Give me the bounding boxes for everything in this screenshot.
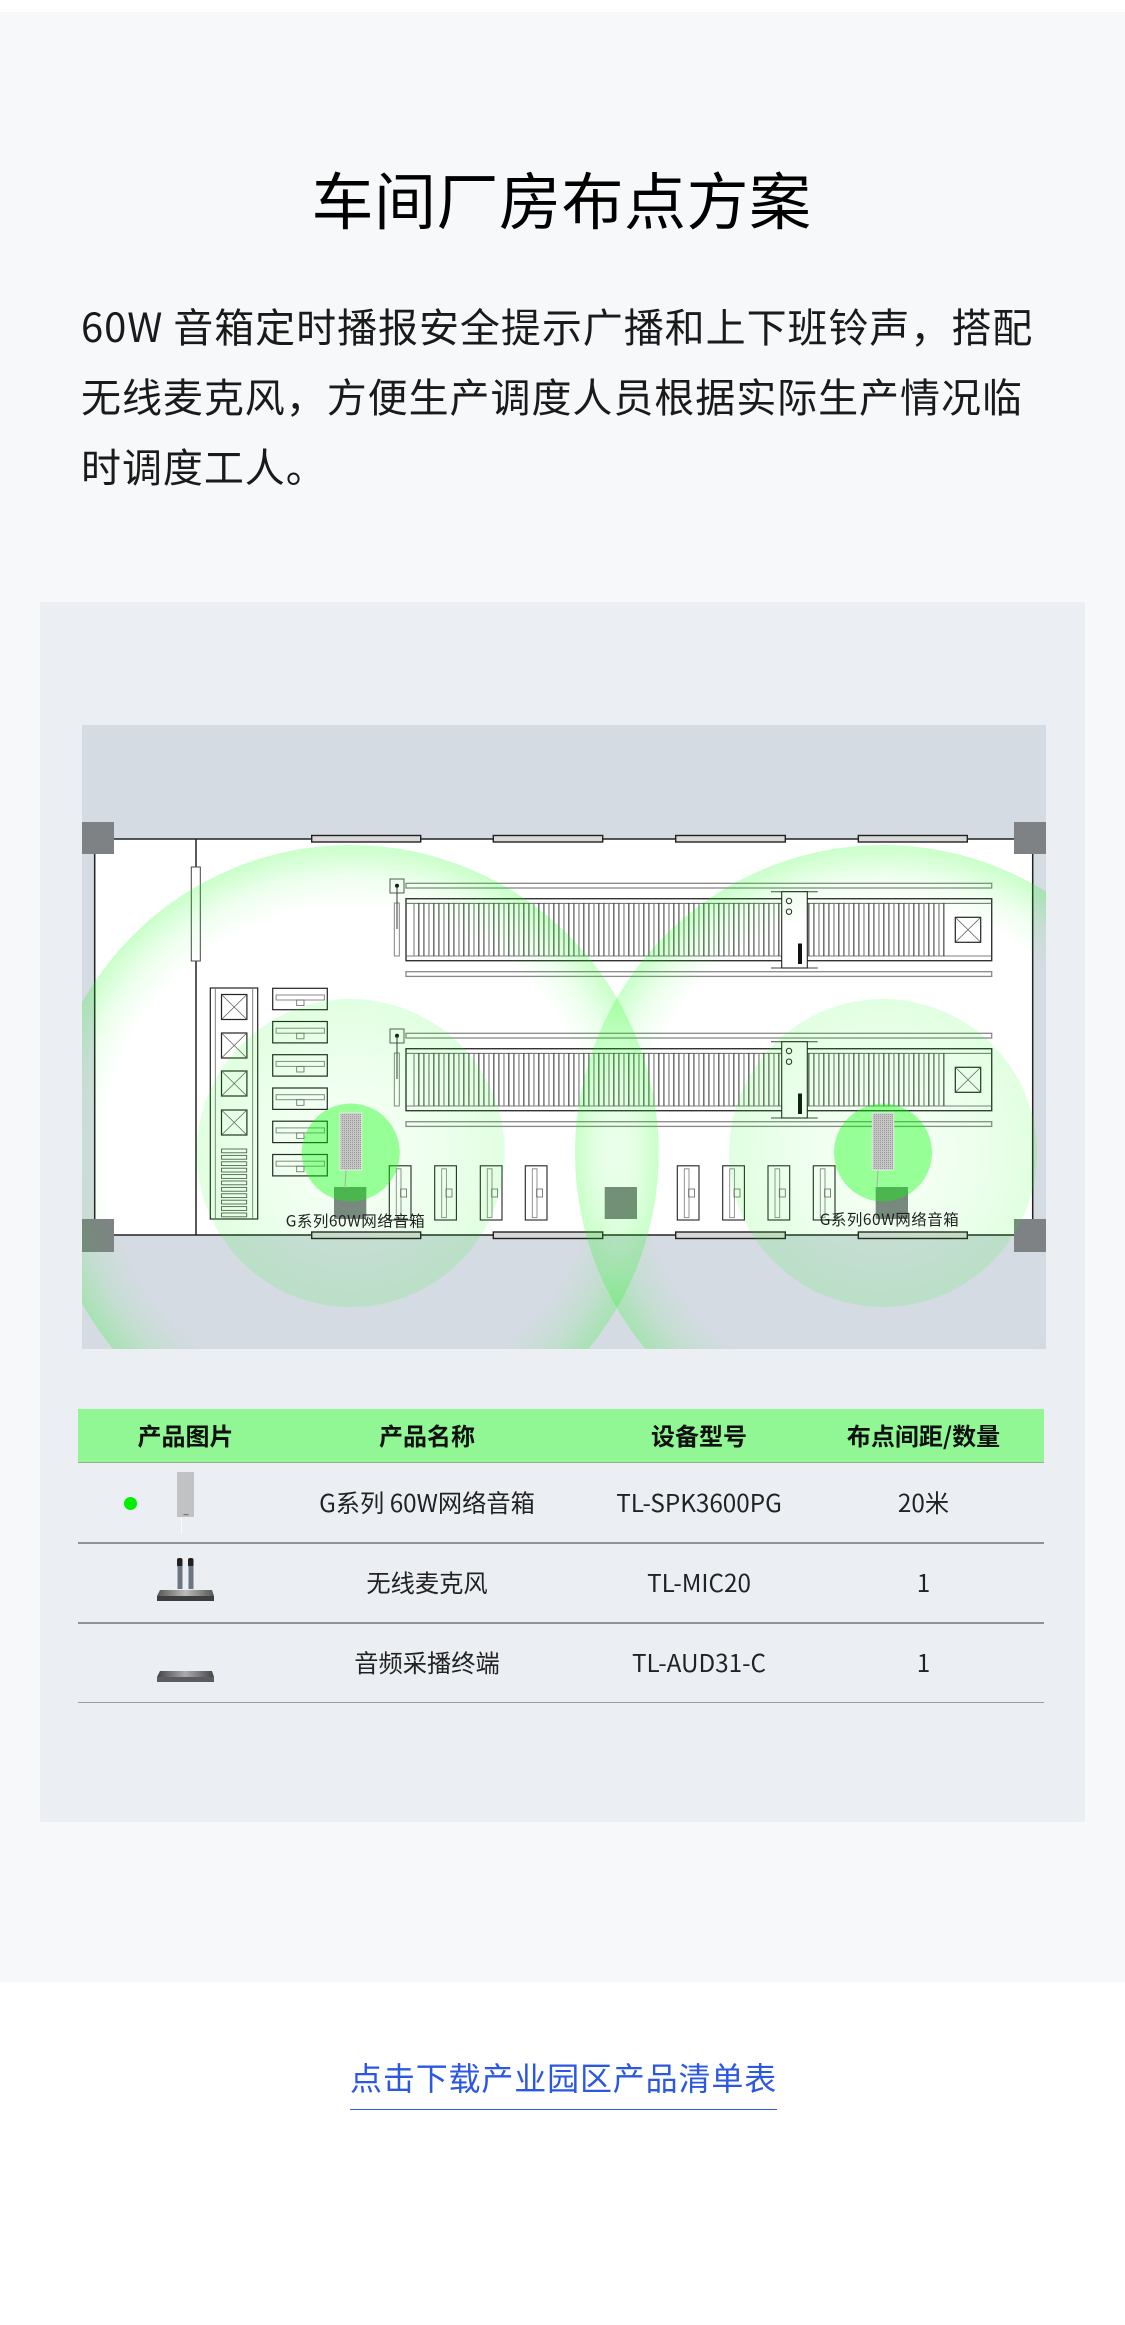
room floor	[95, 839, 1033, 1235]
description text: 无线麦克风，方便生产调度人员根据实际生产情况临	[81, 366, 1023, 424]
machines row	[389, 1166, 835, 1220]
table row: microphone	[78, 1544, 1044, 1624]
bottom windows	[312, 1232, 967, 1238]
name: 无线麦克风	[366, 1564, 488, 1599]
table row: speaker	[78, 1463, 1044, 1544]
room walls	[95, 839, 1033, 1235]
quantity: 1	[917, 1564, 930, 1599]
header: model: 设备型号	[651, 1417, 747, 1452]
icon: audio terminal	[157, 1671, 214, 1682]
conveyor line 2	[390, 1029, 992, 1126]
header: product image: 产品图片	[138, 1417, 234, 1452]
table row: audio terminal	[78, 1624, 1044, 1703]
model: TL-SPK3600PG	[616, 1484, 782, 1519]
model: TL-MIC20	[647, 1564, 751, 1599]
name: 音频采播终端	[354, 1644, 500, 1679]
cabinet column	[210, 988, 258, 1219]
quantity: 1	[917, 1644, 930, 1679]
floor plan	[82, 725, 1046, 1349]
icon: right speaker	[872, 1113, 894, 1188]
legend dot	[124, 1496, 137, 1510]
description text: 时调度工人。	[81, 436, 327, 494]
description text	[81, 296, 1033, 494]
label: left speaker: G系列60W网络音箱	[286, 1210, 425, 1232]
icon: wireless microphone	[157, 1558, 214, 1601]
description text: 60W 音箱定时播报安全提示广播和上下班铃声，搭配	[81, 296, 1033, 354]
table header	[78, 1409, 1044, 1463]
header: product name: 产品名称	[379, 1417, 475, 1452]
label: right speaker: G系列60W网络音箱	[820, 1208, 959, 1230]
title: 车间厂房布点方案	[312, 152, 812, 242]
icon: speaker product	[177, 1472, 194, 1534]
download link: 点击下载产业园区产品清单表	[350, 2054, 777, 2100]
panel: layout and product list	[40, 602, 1085, 1822]
door on divider wall	[191, 867, 200, 961]
top windows	[312, 836, 967, 842]
plan background	[82, 725, 1046, 1349]
icon: left speaker	[340, 1113, 362, 1188]
header: spacing and quantity: 布点间距/数量	[847, 1417, 1000, 1452]
structural columns	[82, 822, 1046, 1252]
model: TL-AUD31-C	[632, 1644, 766, 1679]
conveyor line 1	[390, 879, 992, 976]
name: G系列 60W网络音箱	[319, 1484, 535, 1519]
spacing: 20米	[898, 1484, 949, 1519]
coverage circles	[82, 845, 1046, 1349]
work benches	[273, 988, 327, 1176]
